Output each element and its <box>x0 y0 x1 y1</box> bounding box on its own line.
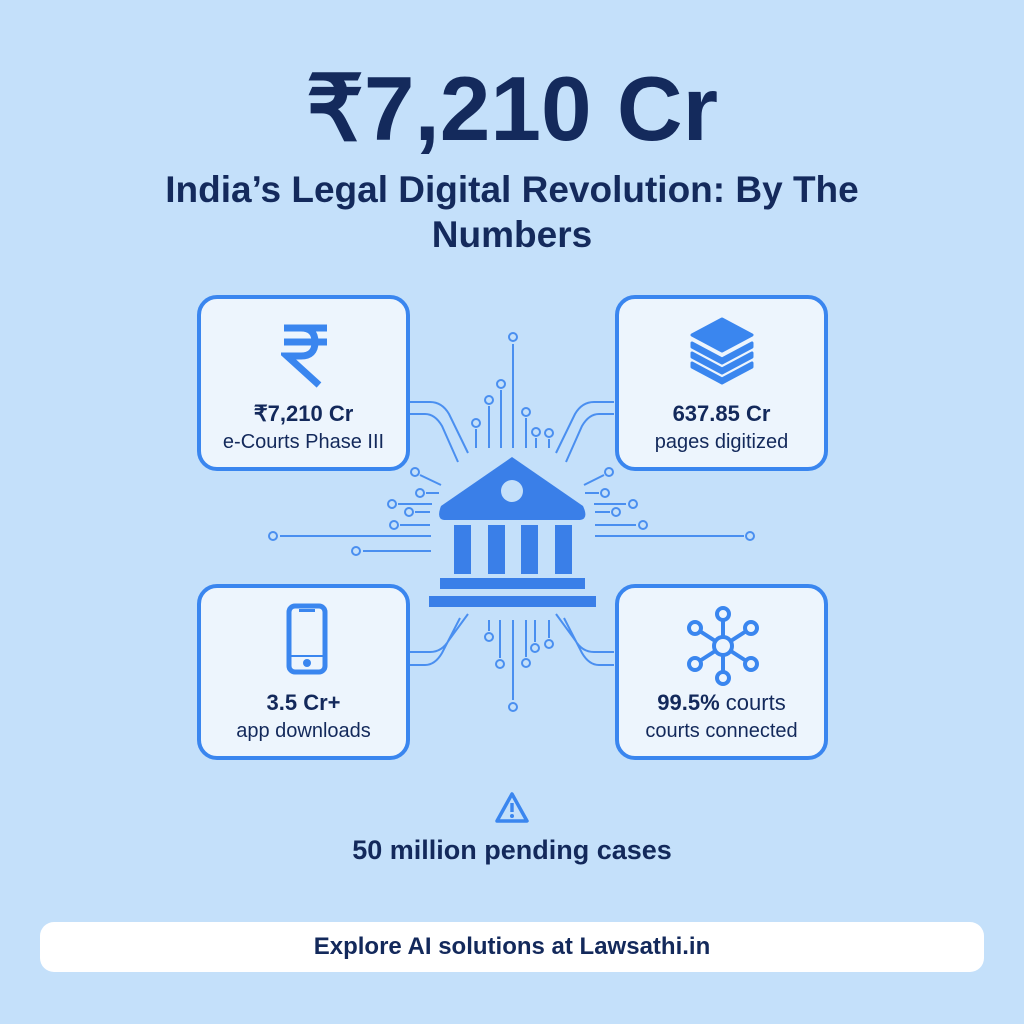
panel: network <box>615 584 828 760</box>
icon: phone <box>286 604 328 674</box>
title: ₹7,210 Cr <box>306 59 718 160</box>
icon: network <box>687 606 759 686</box>
pending cases text: 50 million pending cases <box>352 835 672 865</box>
icon: court building <box>429 457 596 607</box>
icon: rupee <box>281 324 327 388</box>
panel: pages: 637.85 Cr <box>673 401 770 426</box>
subtitle <box>165 169 859 255</box>
panel: budget: ₹7,210 Cr <box>254 401 353 426</box>
panel: app <box>197 584 410 760</box>
subtitle: Numbers <box>432 214 592 255</box>
panel: budget <box>197 295 410 471</box>
panel: budget: e-Courts Phase III <box>223 431 384 453</box>
footer bar <box>40 922 984 972</box>
panel: network: courts connected <box>645 720 798 742</box>
footer bar: Explore AI solutions at Lawsathi.in <box>314 933 710 960</box>
icon: warning <box>495 792 529 823</box>
panel: pages: pages digitized <box>655 431 788 453</box>
subtitle: India’s Legal Digital Revolution: By The <box>165 169 859 210</box>
panel: pages <box>615 295 828 471</box>
panel: app: 3.5 Cr+ <box>266 690 340 715</box>
panel: app: app downloads <box>236 720 371 742</box>
icon: layers <box>690 318 754 384</box>
panel: network: 99.5% courts <box>657 690 786 715</box>
